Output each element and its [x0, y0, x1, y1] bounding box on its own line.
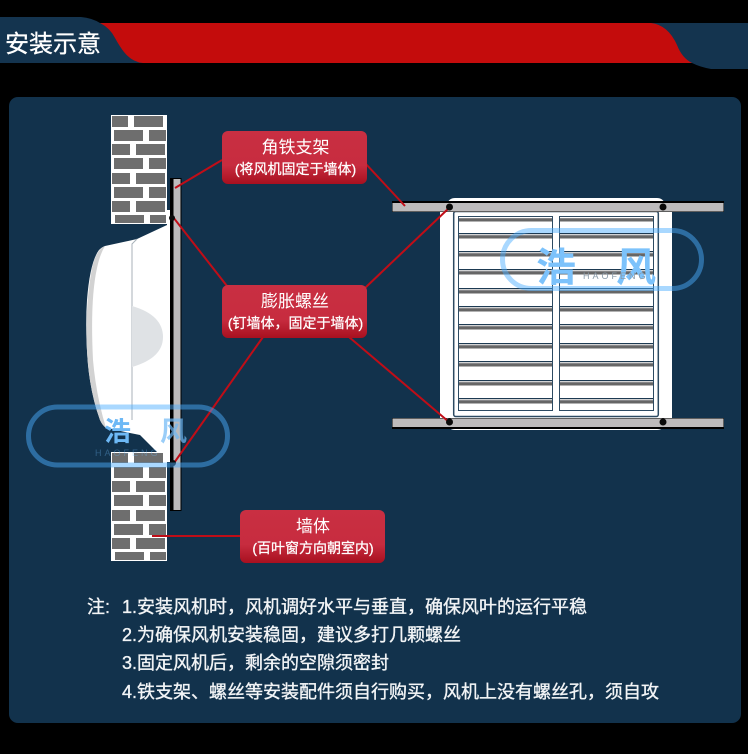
- watermark right: [502, 230, 702, 290]
- label: expansion screw: 膨胀螺丝: [261, 292, 329, 311]
- label: expansion screw: (钉墙体，固定于墙体): [228, 315, 363, 331]
- side view: fan body: [86, 210, 170, 462]
- watermark right: 风: [616, 246, 656, 290]
- side view: angle iron plate: [170, 178, 182, 511]
- header red band: [70, 23, 700, 63]
- label: expansion screw: [222, 285, 367, 338]
- fan rim shading: [86, 246, 106, 428]
- installation notes: 2.为确保风机安装稳固，建议多打几颗螺丝: [122, 625, 461, 645]
- watermark right: HAOFENG: [583, 271, 649, 281]
- label: wall: [240, 510, 385, 563]
- left louver column: [458, 216, 552, 410]
- front view: top rail: [392, 201, 724, 212]
- watermark left: 浩: [104, 417, 131, 447]
- fan seam: [132, 239, 137, 420]
- screws: [169, 204, 666, 466]
- installation notes: 3.固定风机后，剩余的空隙须密封: [122, 653, 389, 673]
- title: 安装示意: [5, 31, 101, 58]
- installation notes: 1.安装风机时，风机调好水平与垂直，确保风叶的运行平稳: [122, 597, 587, 617]
- fan motor bulge: [132, 306, 163, 367]
- front view: bottom rail: [392, 418, 724, 429]
- label: angle iron: 角铁支架: [262, 138, 330, 157]
- installation notes: 4.铁支架、螺丝等安装配件须自行购买，风机上没有螺丝孔，须自攻: [122, 682, 659, 702]
- label: wall: 墙体: [296, 517, 330, 536]
- front view: louver fan: [440, 198, 672, 430]
- watermark left: HAOFENG: [95, 448, 161, 458]
- side view: bottom brick wall: [111, 452, 167, 561]
- fan housing: [440, 198, 672, 430]
- label: wall: (百叶窗方向朝室内): [252, 540, 374, 556]
- watermark left: 风: [160, 417, 187, 447]
- leader lines: [152, 160, 449, 536]
- header left tab: [0, 17, 143, 63]
- watermark left: [28, 407, 228, 465]
- header right tab: [651, 23, 748, 69]
- inner frame: [454, 212, 658, 416]
- header banner: [0, 17, 748, 69]
- label: angle iron: [222, 131, 367, 184]
- installation notes: [87, 597, 659, 702]
- watermark right: 浩: [536, 246, 576, 290]
- installation notes: 注:: [87, 597, 110, 617]
- right louver column: [560, 216, 654, 410]
- label: angle iron: (将风机固定于墙体): [235, 161, 356, 177]
- side view: top brick wall: [111, 115, 167, 224]
